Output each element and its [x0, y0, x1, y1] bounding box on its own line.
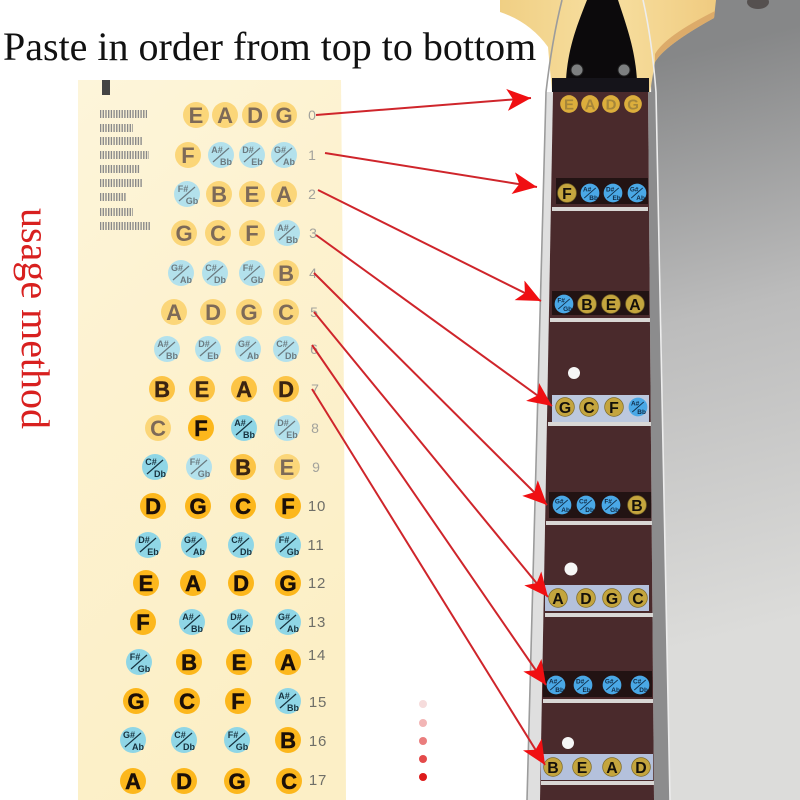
- sheet row 17: C: [281, 769, 297, 794]
- truss rod cover: [566, 0, 637, 80]
- sheet row 4: C#: [205, 263, 217, 273]
- small print block on sheet: [100, 110, 150, 230]
- sheet row 12: [133, 570, 326, 596]
- sheet row 6: Ab: [247, 351, 259, 361]
- sheet row 4: Ab: [180, 275, 192, 285]
- sheet row 7: [149, 376, 319, 402]
- arrow 7: [312, 389, 545, 765]
- sheet row 8: A#: [234, 418, 246, 428]
- sheet row 2: F#: [178, 184, 188, 194]
- sheet row 11: [135, 532, 325, 558]
- sheet row 8: D#: [277, 418, 289, 428]
- icon: small black mark on sheet: [102, 80, 110, 95]
- binding line left: [527, 0, 562, 800]
- arrow 4: [314, 273, 547, 505]
- sheet row 1: Bb: [220, 157, 232, 167]
- nut: [552, 78, 649, 92]
- sheet row 3: [171, 220, 317, 246]
- neck side strip right: [648, 92, 670, 800]
- sheet row 12: G: [279, 571, 297, 596]
- sheet row 17: [120, 768, 327, 794]
- sheet row 16: 16: [309, 733, 327, 750]
- neck row 1: D#: [606, 187, 615, 194]
- sheet row 4: G#: [171, 263, 183, 273]
- sheet row 9: F#: [190, 457, 200, 467]
- sheet row 13: F: [136, 610, 150, 635]
- sheet row 13: [130, 609, 326, 635]
- sheet row 11: C#: [231, 535, 243, 545]
- arrow 1: [325, 153, 537, 187]
- neck row 7: B: [547, 760, 559, 777]
- sheet row 5: A: [166, 300, 182, 325]
- sheet row 15: F: [231, 689, 245, 714]
- arrow 3: [316, 235, 552, 406]
- neck row 3: C: [583, 400, 595, 417]
- sheet row 9: 9: [312, 459, 320, 475]
- sheet row 3: F: [245, 221, 259, 246]
- sheet row 8: Eb: [286, 430, 298, 440]
- sheet row 7: A: [236, 377, 252, 402]
- sheet row 1: Eb: [251, 157, 263, 167]
- sheet row 4: B: [278, 261, 294, 286]
- neck row 1: G#: [630, 187, 639, 194]
- sheet row 14: F#: [130, 652, 140, 662]
- neck row 0: D: [606, 96, 617, 113]
- sheet row 1: G#: [274, 145, 286, 155]
- sheet row 6: Eb: [207, 351, 219, 361]
- sheet row 0: A: [217, 103, 233, 128]
- arrow 5: [314, 312, 548, 597]
- neck row 2: F#: [557, 298, 565, 305]
- sheet row 11: Db: [240, 547, 252, 557]
- arrow 2: [318, 190, 541, 301]
- neck row 6: [547, 676, 649, 694]
- sheet row 13: Bb: [191, 624, 203, 634]
- sheet row 9: B: [235, 455, 251, 480]
- neck row 0: G: [627, 96, 639, 113]
- sheet row 17: 17: [309, 772, 327, 789]
- sheet row 6: Bb: [166, 351, 178, 361]
- sheet row 4: [168, 260, 317, 286]
- panel: fretboard sticker sheet: [78, 80, 346, 800]
- neck row 2: B: [581, 297, 593, 314]
- sheet row 15: A#: [278, 691, 290, 701]
- pagination dots: [419, 700, 427, 781]
- sheet row 0: [183, 102, 316, 128]
- neck row 7: E: [577, 760, 587, 777]
- sheet row 11: D#: [138, 535, 150, 545]
- sheet row 6: Db: [285, 351, 297, 361]
- sheet row 12: D: [233, 571, 249, 596]
- sheet row 2: B: [211, 182, 227, 207]
- neck row 3: F: [609, 400, 619, 417]
- neck row 2: A: [629, 297, 641, 314]
- sheet row 8: [145, 415, 319, 441]
- sheet row 8: F: [194, 416, 208, 441]
- sheet row 3: C: [210, 221, 226, 246]
- sheet row 14: E: [232, 650, 246, 675]
- sheet row 12: 12: [308, 575, 326, 592]
- neck row 1: Ab: [636, 195, 645, 202]
- sheet row 13: Eb: [239, 624, 251, 634]
- sheet row 10: [140, 493, 326, 519]
- neck row 6: D#: [576, 679, 585, 686]
- neck row 4: C#: [579, 499, 588, 506]
- sheet row 11: Gb: [287, 547, 300, 557]
- sheet row 4: F#: [243, 263, 253, 273]
- icon: bolt left: [571, 64, 583, 76]
- neck row 0: [560, 95, 642, 113]
- neck row 7: D: [635, 760, 647, 777]
- sheet row 9: [142, 454, 320, 480]
- neck row 6: G#: [605, 679, 614, 686]
- sheet row 16: Gb: [236, 742, 249, 752]
- sheet row 5: [161, 299, 318, 325]
- sheet row 13: 13: [308, 614, 326, 631]
- sheet row 16: [120, 727, 327, 753]
- neck row 5: [549, 589, 647, 608]
- sheet row 10: C: [235, 494, 251, 519]
- sheet row 6: C#: [276, 339, 288, 349]
- neck row 0: E: [564, 96, 574, 113]
- sheet row 17: A: [125, 769, 141, 794]
- sheet row 10: F: [281, 494, 295, 519]
- neck row 4: Ab: [561, 507, 570, 514]
- sheet row 6: A#: [157, 339, 169, 349]
- neck row 6: Bb: [555, 687, 564, 694]
- sheet row 1: D#: [242, 145, 254, 155]
- title: Paste in order from top to bottom: [3, 24, 536, 69]
- neck row 6: Ab: [611, 687, 620, 694]
- neck row 5: C: [632, 591, 644, 608]
- neck row 4: F#: [604, 499, 612, 506]
- sheet row 17: G: [228, 769, 246, 794]
- neck row 3: Bb: [637, 409, 646, 416]
- sheet row 2: [174, 181, 316, 207]
- sheet row 3: A#: [277, 223, 289, 233]
- sheet row 13: Ab: [287, 624, 299, 634]
- sheet row 15: C: [179, 689, 195, 714]
- sheet row 16: C#: [174, 730, 186, 740]
- sheet row 9: Gb: [198, 469, 211, 479]
- arrows: sheet rows to neck positions: [312, 98, 552, 765]
- binding line right: [643, 0, 670, 800]
- arrow 6: [312, 345, 546, 685]
- neck row 4: B: [631, 498, 643, 515]
- sheet row 11: Eb: [147, 547, 159, 557]
- sheet row 14: B: [181, 650, 197, 675]
- sheet row 0: D: [247, 103, 263, 128]
- neck row 2: Gb: [563, 306, 572, 313]
- sheet row 15: 15: [309, 694, 327, 711]
- side label: usage method: usage method: [13, 208, 58, 429]
- fretboard: [540, 92, 654, 800]
- position dot 2: [564, 562, 578, 576]
- neck row 4: G#: [555, 499, 564, 506]
- sheet row 16: B: [280, 728, 296, 753]
- sheet row 11: 11: [307, 537, 325, 554]
- sheet row 9: C#: [145, 457, 157, 467]
- neck row 2: [555, 295, 644, 314]
- sheet row 10: D: [145, 494, 161, 519]
- sheet row 15: G: [127, 689, 145, 714]
- sheet row 5: C: [278, 300, 294, 325]
- panel: guitar headstock: [500, 0, 769, 92]
- panel: guitar neck: [527, 92, 670, 800]
- sheet row 16: Db: [183, 742, 195, 752]
- sheet row 13: D#: [230, 612, 242, 622]
- sheet row 12: E: [139, 571, 153, 596]
- sheet row 2: A: [276, 182, 292, 207]
- sheet row 6: 6: [310, 341, 318, 357]
- neck row 1: Eb: [612, 195, 621, 202]
- neck row 7: A: [606, 760, 618, 777]
- sheet row 5: D: [205, 300, 221, 325]
- sheet row 1: A#: [211, 145, 223, 155]
- neck row 0: A: [585, 96, 596, 113]
- neck row 3: G: [559, 400, 571, 417]
- neck row 4: Gb: [610, 507, 619, 514]
- neck row 1: [558, 184, 646, 203]
- sheet row 16: F#: [228, 730, 238, 740]
- sheet row 8: 8: [311, 420, 319, 436]
- sheet row 1: Ab: [283, 157, 295, 167]
- neck row 1: F: [562, 186, 572, 203]
- sheet row 3: G: [175, 221, 193, 246]
- neck row 4: Db: [585, 507, 594, 514]
- sheet row 2: Gb: [186, 196, 199, 206]
- sticker bands: [541, 178, 653, 780]
- neck row 6: Db: [639, 687, 648, 694]
- sheet row 0: E: [189, 103, 203, 128]
- neck row 3: [556, 398, 647, 417]
- sheet row 1: [175, 142, 316, 168]
- sheet row 8: C: [150, 416, 166, 441]
- sheet row 4: Gb: [251, 275, 264, 285]
- sheet row 9: Db: [154, 469, 166, 479]
- neck row 5: G: [606, 591, 618, 608]
- sheet row 16: G#: [123, 730, 135, 740]
- neck row 5: A: [552, 591, 564, 608]
- neck row 6: A#: [549, 679, 558, 686]
- panel: grey backdrop right of neck: [650, 0, 800, 800]
- fret wires: [541, 207, 654, 785]
- sheet row 0: G: [275, 103, 293, 128]
- neck row 7: [544, 758, 650, 777]
- sheet row 4: Db: [214, 275, 226, 285]
- neck row 6: Eb: [582, 687, 591, 694]
- neck side strip left: [527, 92, 553, 800]
- sheet row 16: Ab: [132, 742, 144, 752]
- sheet row 6: D#: [198, 339, 210, 349]
- sheet row 7: 7: [311, 381, 319, 397]
- arrow 0: [316, 98, 531, 115]
- sheet row 2: E: [245, 182, 259, 207]
- sheet row 14: A: [280, 650, 296, 675]
- sheet row 1: 1: [308, 147, 316, 163]
- sheet row 13: A#: [182, 612, 194, 622]
- sheet row 3: Bb: [286, 235, 298, 245]
- position dot 3: [562, 737, 574, 749]
- sheet row 15: [123, 688, 327, 714]
- sheet row 14: [126, 647, 326, 675]
- sheet row 14: Gb: [138, 664, 151, 674]
- icon: tuner knob: [747, 0, 769, 9]
- neck row 1: Bb: [589, 195, 598, 202]
- sheet row 6: G#: [238, 339, 250, 349]
- neck row 1: A#: [583, 187, 592, 194]
- sheet row 7: D: [278, 377, 294, 402]
- sheet row 10: G: [189, 494, 207, 519]
- sheet row 1: F: [181, 143, 195, 168]
- sheet row 14: 14: [308, 647, 326, 664]
- sheet row 7: E: [195, 377, 209, 402]
- sheet row 8: Bb: [243, 430, 255, 440]
- sheet row 10: 10: [308, 498, 326, 515]
- sheet row 11: Ab: [193, 547, 205, 557]
- sheet row 11: G#: [184, 535, 196, 545]
- sheet row 7: B: [154, 377, 170, 402]
- position dot 1: [568, 367, 580, 379]
- neck row 5: D: [580, 591, 592, 608]
- sheet row 2: 2: [308, 186, 316, 202]
- sheet row 0: 0: [308, 107, 316, 123]
- sheet row 15: Bb: [287, 703, 299, 713]
- sheet row 3: 3: [309, 225, 317, 241]
- sheet row 13: G#: [278, 612, 290, 622]
- sheet row 4: 4: [309, 265, 317, 281]
- sheet row 5: G: [240, 300, 258, 325]
- sheet row 12: A: [185, 571, 201, 596]
- neck row 4: [553, 496, 646, 515]
- neck row 6: C#: [633, 679, 642, 686]
- neck row 3: A#: [631, 401, 640, 408]
- sheet row 11: F#: [279, 535, 289, 545]
- sheet row 5: 5: [310, 304, 318, 320]
- sheet row 17: D: [176, 769, 192, 794]
- sheet row 9: E: [280, 455, 294, 480]
- sheet row 6: [154, 336, 318, 362]
- icon: bolt right: [618, 64, 630, 76]
- neck row 2: E: [606, 297, 616, 314]
